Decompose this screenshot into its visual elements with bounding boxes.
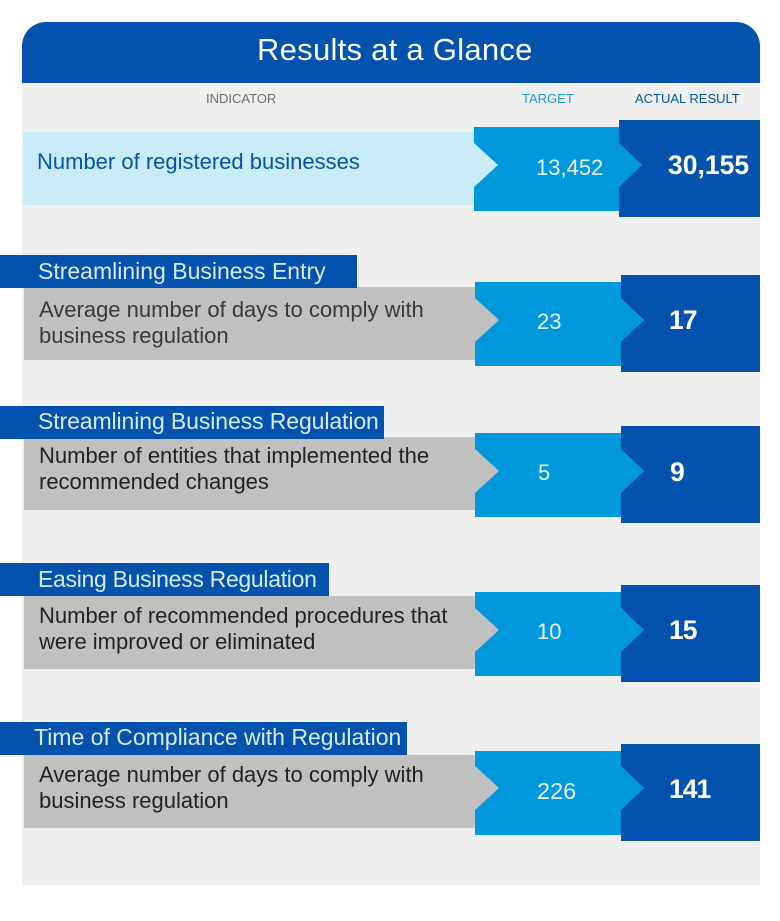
row 2 target value: 23 [537, 309, 561, 334]
row 2 indicator [24, 287, 502, 360]
column header: indicator: INDICATOR [206, 91, 276, 106]
row 5 heading: Time of Compliance with Regulation [34, 724, 401, 750]
row 5 indicator: business regulation [39, 788, 229, 813]
row 5 indicator [24, 755, 502, 828]
row 4 target value: 10 [537, 619, 561, 644]
row 5 indicator: Average number of days to comply with [39, 762, 424, 787]
row 1 indicator: Number of registered businesses [37, 149, 360, 174]
row 1 indicator [23, 132, 501, 205]
column header: target: TARGET [522, 91, 574, 106]
column header: actual result: ACTUAL RESULT [635, 91, 740, 106]
row 5 target value: 226 [537, 778, 576, 804]
row 4 actual value: 15 [669, 615, 696, 645]
row 3 indicator: Number of entities that implemented the [39, 443, 429, 468]
row 1 target value: 13,452 [536, 155, 603, 180]
row 2 actual value: 17 [669, 305, 696, 335]
row 4 heading: Easing Business Regulation [38, 566, 317, 592]
row 3 actual value: 9 [670, 457, 685, 487]
row 4 indicator: Number of recommended procedures that [39, 603, 447, 628]
row 3 indicator: recommended changes [39, 469, 269, 494]
row 4 indicator: were improved or eliminated [39, 629, 315, 654]
row 3 indicator [24, 437, 502, 510]
row 4 indicator [24, 596, 502, 669]
row 4 heading [0, 563, 329, 596]
title banner [22, 22, 760, 83]
row 5 actual value: 141 [669, 774, 710, 804]
row 3 heading: Streamlining Business Regulation [38, 408, 379, 434]
row 2 indicator: business regulation [39, 323, 229, 348]
row 1 actual value: 30,155 [668, 150, 749, 180]
row 2 indicator: Average number of days to comply with [39, 297, 424, 322]
row 3 heading [0, 406, 384, 439]
row 3 target value: 5 [538, 460, 550, 485]
title banner: Results at a Glance [257, 32, 533, 67]
row 2 heading: Streamlining Business Entry [38, 258, 326, 284]
row 2 heading [0, 255, 357, 288]
